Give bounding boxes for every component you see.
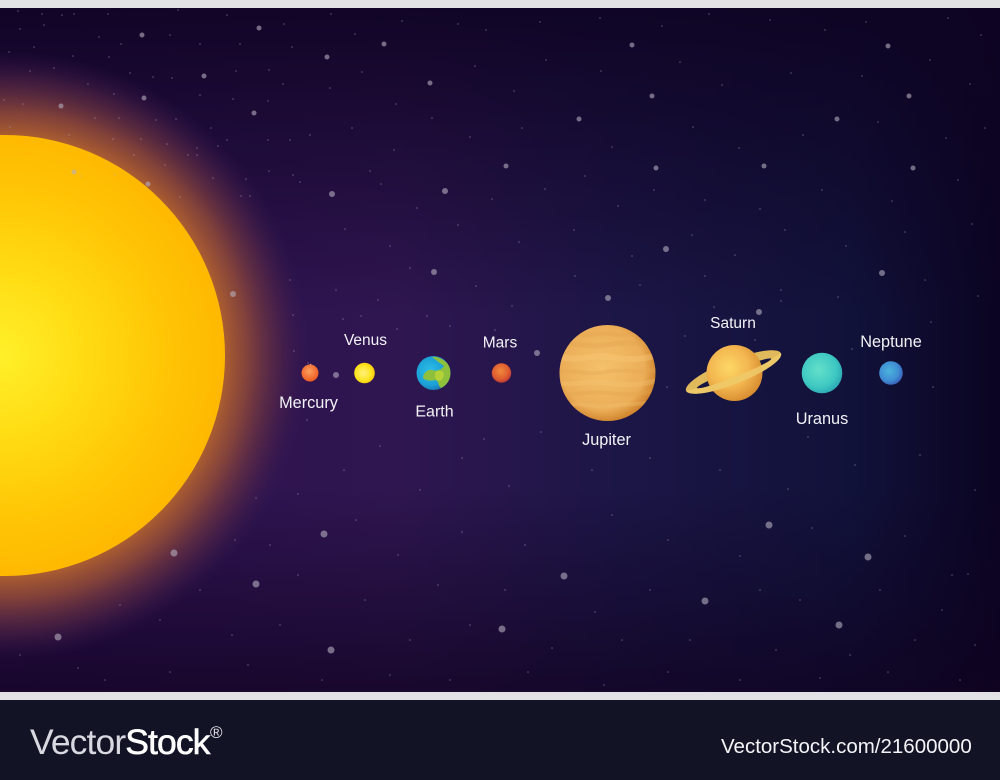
planet: Mercury xyxy=(302,364,318,382)
label: Saturn: Saturn xyxy=(710,315,756,332)
label: Mars: Mars xyxy=(483,334,517,352)
Saturn body xyxy=(706,345,762,401)
planet: Uranus xyxy=(802,353,842,393)
label: Uranus: Uranus xyxy=(796,410,848,428)
planet: Neptune xyxy=(879,361,903,385)
top page margin xyxy=(0,0,1000,8)
registered mark: ® xyxy=(210,723,223,742)
front ring xyxy=(686,353,785,402)
label: Neptune: Neptune xyxy=(860,333,922,351)
large stars xyxy=(54,26,916,654)
footer logo: VectorStock xyxy=(30,722,211,762)
label: Venus: Venus xyxy=(344,332,387,349)
bottom margin strip xyxy=(0,692,1000,700)
planet: Venus xyxy=(354,363,375,383)
planet: Mars xyxy=(492,363,511,383)
footer bar xyxy=(0,700,1000,780)
label: Earth: Earth xyxy=(415,404,454,420)
sun glow xyxy=(0,50,310,660)
footer url: VectorStock.com/21600000 xyxy=(721,735,972,758)
sun xyxy=(0,135,225,576)
back ring xyxy=(682,342,785,402)
planet: Saturn with rings xyxy=(682,342,785,402)
label: Mercury: Mercury xyxy=(279,394,339,412)
planet: Earth xyxy=(416,356,451,390)
label: Jupiter: Jupiter xyxy=(582,431,632,449)
planet: Jupiter xyxy=(558,325,656,421)
